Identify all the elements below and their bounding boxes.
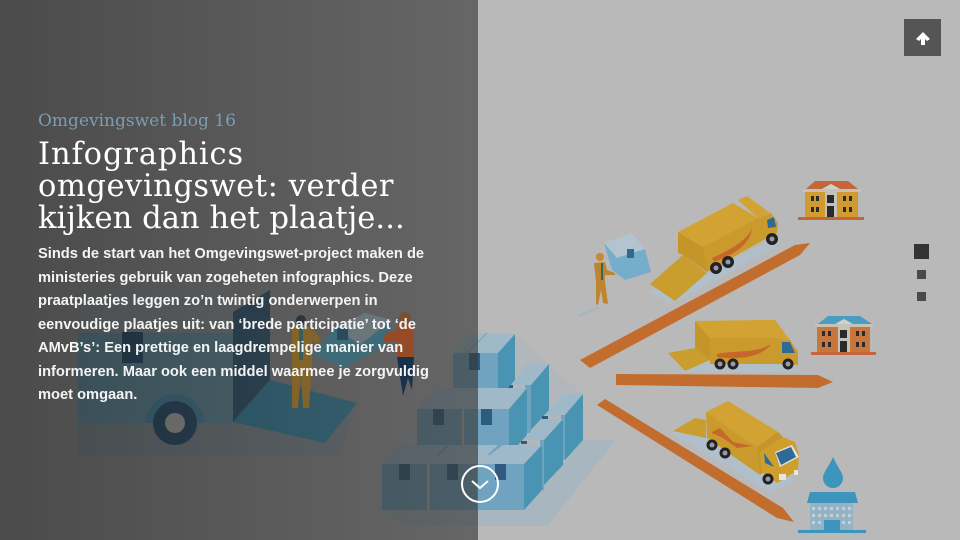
title <box>38 137 405 236</box>
truck three <box>672 401 799 493</box>
illustration: stacked boxes <box>382 333 616 526</box>
intro paragraph: informeren. Maar ook een middel waarmee je zorgvuldig <box>38 364 429 380</box>
building: middle house <box>811 316 876 355</box>
kicker: Omgevingswet blog 16 <box>38 111 236 131</box>
illustration: delivery van being unloaded <box>78 290 357 456</box>
back to top button <box>904 19 941 56</box>
scroll down button <box>462 466 498 502</box>
title: omgevingswet: verder <box>38 169 394 204</box>
icon: water drop <box>823 457 843 488</box>
dark overlay panel <box>0 0 478 540</box>
intro paragraph: praatplaatjes leggen zo’n twintig onderwerpen in <box>38 293 378 309</box>
intro paragraph <box>38 246 429 403</box>
road arrow to top house <box>580 243 810 368</box>
illustration: two people carrying a box <box>292 312 414 408</box>
intro paragraph: Sinds de start van het Omgevingswet-project maken de <box>38 246 424 262</box>
road arrow to middle house <box>616 374 833 388</box>
title: kijken dan het plaatje... <box>38 201 405 236</box>
building: top house <box>798 181 864 220</box>
truck two <box>668 320 800 372</box>
title: Infographics <box>38 137 244 172</box>
intro paragraph: eenvoudige plaatjes uit: van ‘brede participatie’ tot ‘de <box>38 316 416 332</box>
truck one <box>648 196 781 304</box>
road arrow to water board <box>597 399 794 522</box>
illustration: person lifting box <box>576 233 651 317</box>
text block <box>38 111 429 403</box>
intro paragraph: moet omgaan. <box>38 387 137 403</box>
building: water board <box>798 492 866 533</box>
intro paragraph: ministeries gebruik van zogeheten infographics. Deze <box>38 270 413 286</box>
intro paragraph: AMvB’s’: Een prettige en laagdrempelige manier van <box>38 340 403 356</box>
slide navigation <box>914 244 929 301</box>
